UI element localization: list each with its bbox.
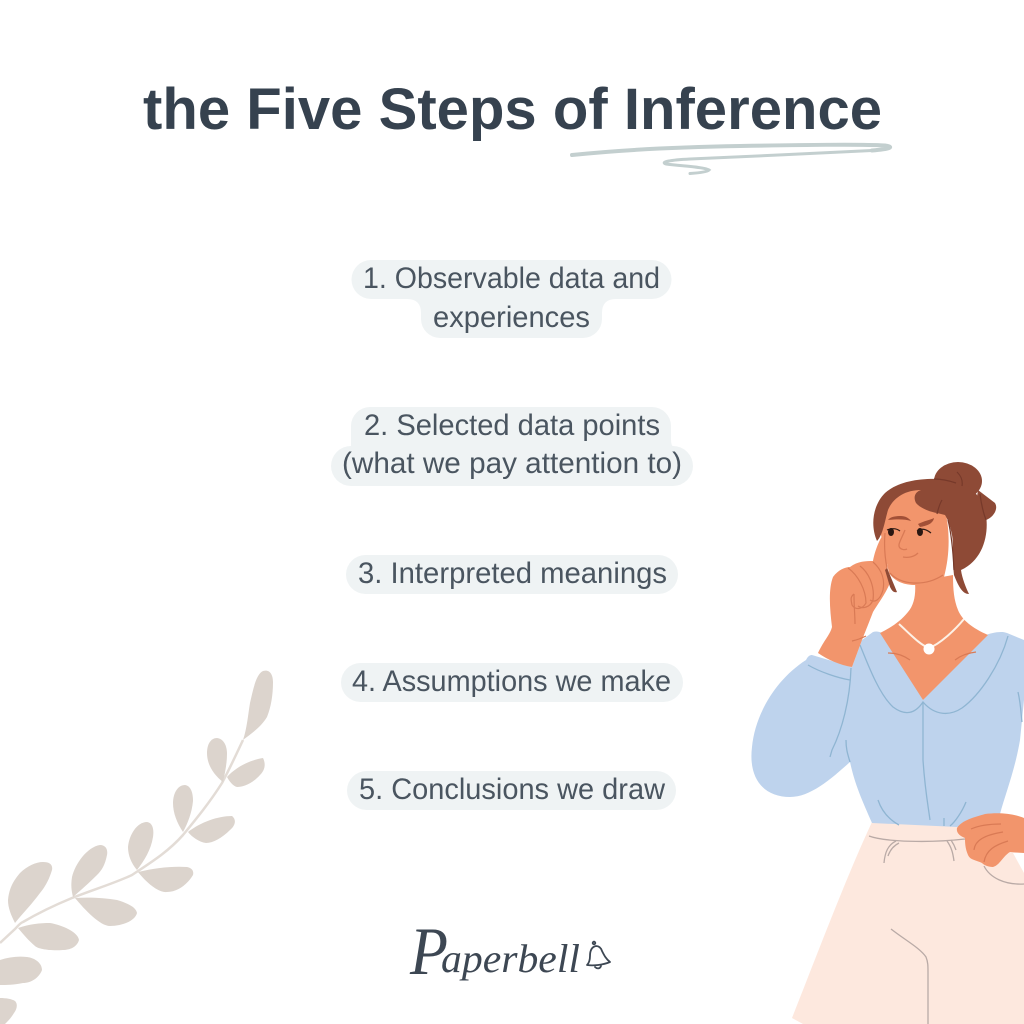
step 1 text: 1. Observable data and: [363, 262, 660, 295]
hair: [873, 462, 996, 594]
step 2 highlight: [331, 407, 693, 486]
face: [880, 488, 949, 586]
collar bones: [888, 652, 976, 660]
raised hand: [818, 532, 897, 667]
step 2 text: 2. Selected data points: [364, 409, 660, 442]
step 5: [347, 771, 676, 810]
step 3 text: 3. Interpreted meanings: [358, 557, 667, 590]
brand logo: [409, 913, 610, 989]
hand on hip: [957, 813, 1024, 867]
title underline swoosh: [572, 145, 890, 174]
wordmark: aperbell: [441, 936, 580, 981]
character illustration: thinking woman: [751, 462, 1024, 1024]
step 3 highlight: [346, 555, 678, 594]
title: the Five Steps of Inference: [143, 77, 882, 142]
step 2: [331, 407, 693, 486]
step 5 text: 5. Conclusions we draw: [359, 773, 666, 806]
step 2 text: (what we pay attention to): [342, 447, 682, 480]
step 3: [346, 555, 678, 594]
step 4 text: 4. Assumptions we make: [352, 665, 671, 698]
necklace: [899, 619, 964, 654]
step 1: [352, 260, 672, 338]
blouse: [751, 632, 1024, 827]
step 4: [341, 663, 683, 702]
step 5 highlight: [347, 771, 676, 810]
neck and chest: [880, 575, 988, 700]
step 1 text: experiences: [433, 301, 590, 334]
step 4 highlight: [341, 663, 683, 702]
icon: bell: [587, 942, 610, 968]
branch illustration: [0, 671, 273, 1024]
step 1 highlight: [352, 260, 672, 338]
skirt: [792, 822, 1024, 1024]
wordmark: P: [409, 913, 448, 989]
